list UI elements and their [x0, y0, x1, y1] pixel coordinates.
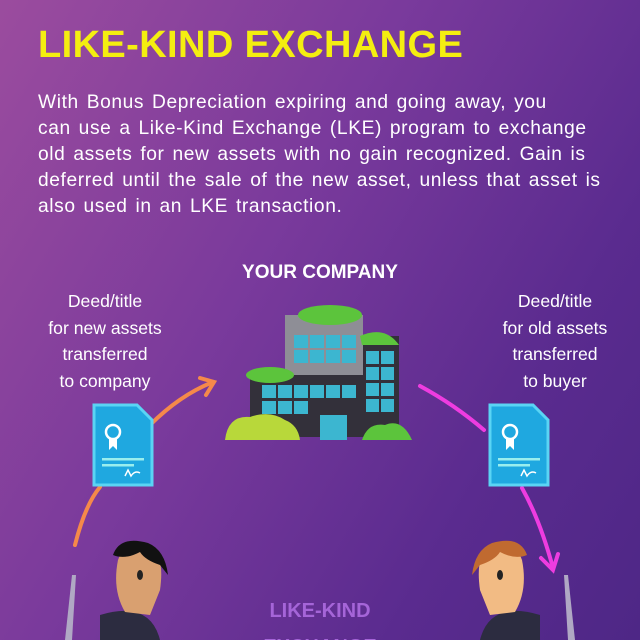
intro text: [38, 92, 601, 217]
label: left: for new assets: [48, 318, 162, 338]
intro text: also used in an LKE transaction.: [38, 196, 342, 217]
label: right: for old assets: [503, 318, 607, 338]
label: right: transferred: [512, 344, 598, 364]
intro text: can use a Like-Kind Exchange (LKE) program to exchange: [38, 118, 587, 139]
label: right: [502, 291, 607, 390]
icon: building: [225, 305, 412, 440]
intro text: With Bonus Depreciation expiring and going away, you: [38, 92, 547, 113]
icon: left document: [94, 405, 152, 485]
title: LIKE-KIND EXCHANGE: [38, 24, 463, 66]
label: right: Deed/title: [518, 291, 592, 311]
label: left: transferred: [62, 344, 148, 364]
arrow: magenta: [420, 386, 558, 570]
intro text: deferred until the sale of the new asset, unless that asset is: [38, 170, 601, 191]
arrow: orange: [75, 378, 214, 545]
label: left: [48, 291, 162, 390]
label: right: to buyer: [523, 370, 587, 390]
person: right: [472, 541, 575, 640]
icon: right document: [490, 405, 548, 485]
heading: your company: YOUR COMPANY: [242, 262, 398, 283]
bottom label: [263, 600, 377, 640]
label: left: to company: [60, 370, 150, 390]
person: left: [65, 541, 168, 640]
intro text: old assets for new assets with no gain recognized. Gain is: [38, 144, 586, 165]
bottom label: LIKE-KIND: [269, 600, 371, 622]
label: left: Deed/title: [68, 291, 142, 311]
